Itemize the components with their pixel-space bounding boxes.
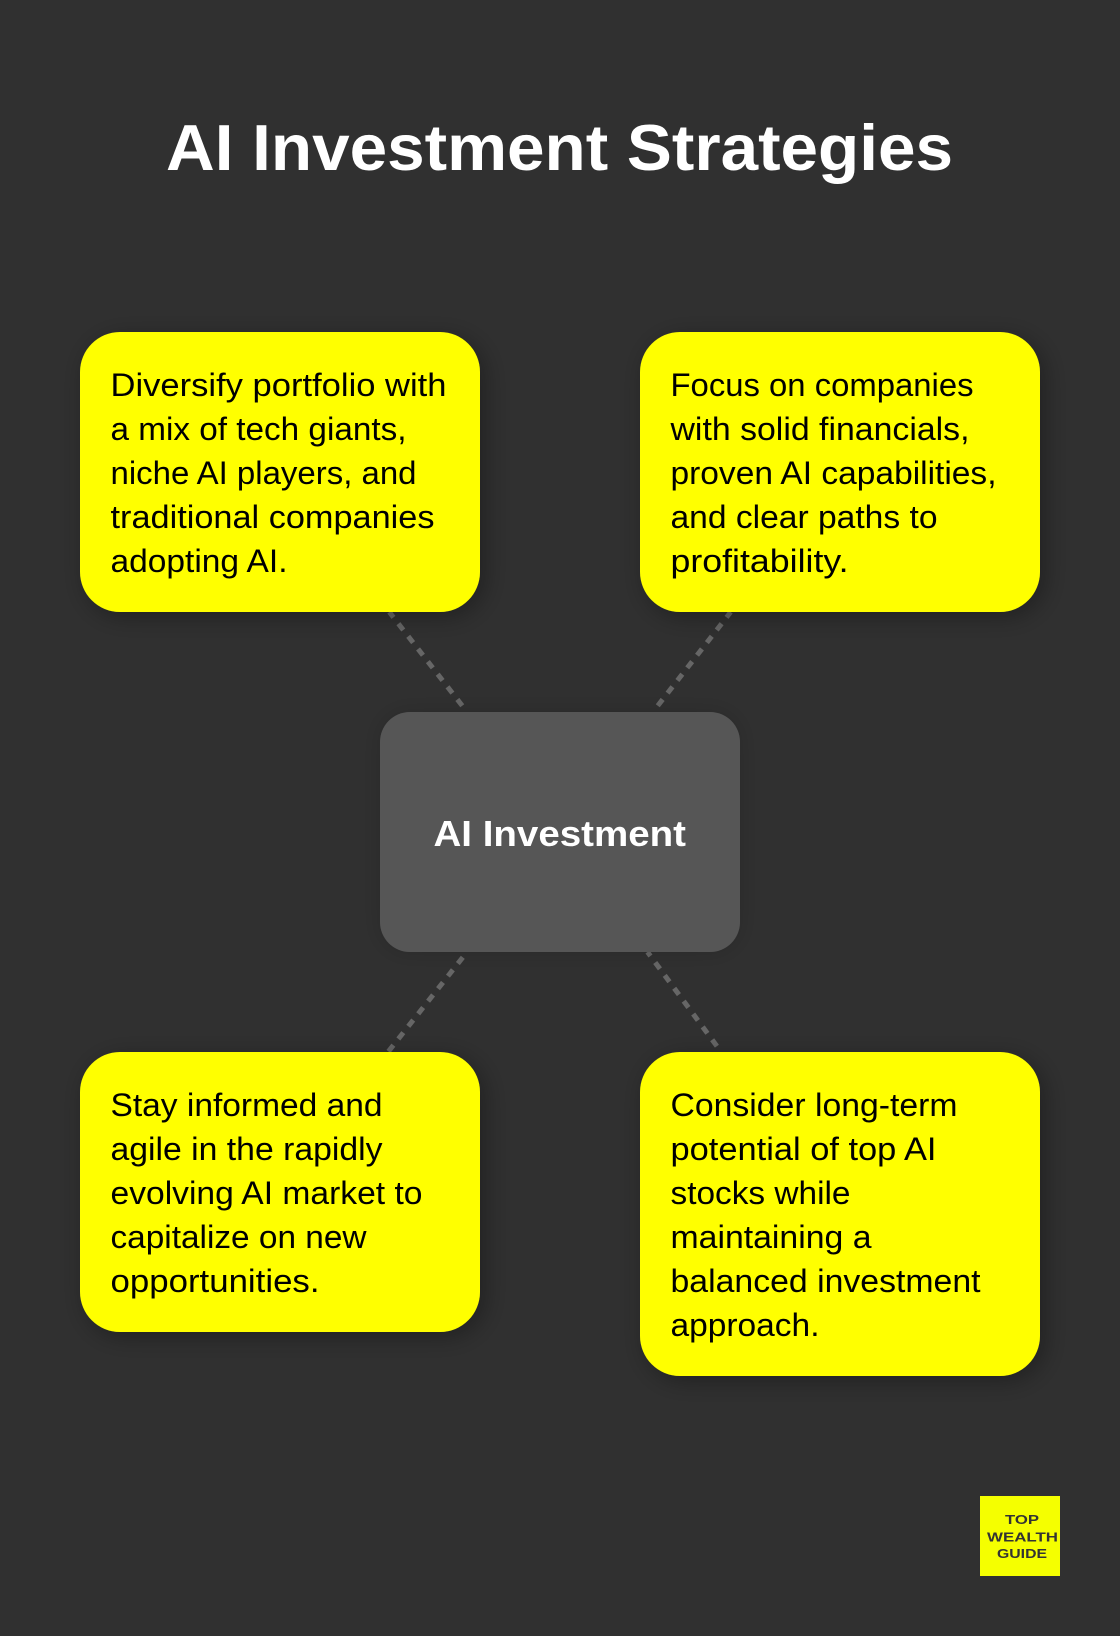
centre label: AI Investment [434,813,686,854]
logo: Top Wealth Guide: WEALTH [987,1530,1058,1544]
panel: centre node [380,712,740,952]
logo: Top Wealth Guide: TOP [1005,1512,1039,1527]
connector: bottom-left card to centre [388,952,467,1052]
text: long-term potential [670,1087,981,1343]
text: focus on companies: profitability. [670,543,848,579]
logo: Top Wealth Guide: GUIDE [997,1546,1047,1561]
connector: bottom-right card to centre [648,952,721,1052]
text: focus on companies: with solid financials, [669,411,970,447]
text: long-term potential: stocks while [670,1175,850,1211]
text: focus on companies [669,367,996,579]
panel: diversify portfolio [80,332,480,612]
text: long-term potential: balanced investment [670,1263,981,1299]
text: diversify portfolio: niche AI players, and [110,455,416,491]
text: stay informed: Stay informed and [110,1087,382,1123]
text: stay informed: opportunities. [110,1263,320,1299]
text: long-term potential: potential of top AI [670,1131,936,1167]
panel: focus on companies [640,332,1040,612]
text: stay informed [110,1087,422,1299]
connector: top-right card to centre [653,612,731,712]
text: focus on companies: and clear paths to [670,499,938,535]
text: diversify portfolio [110,367,446,579]
connector: top-left card to centre [389,612,467,712]
text: long-term potential: maintaining a [670,1219,872,1255]
text: diversify portfolio: adopting AI. [110,543,288,579]
text: diversify portfolio: Diversify portfolio with [110,367,446,403]
text: stay informed: evolving AI market to [110,1175,422,1211]
text: stay informed: capitalize on new [110,1219,367,1255]
panel: long-term potential [640,1052,1040,1376]
text: long-term potential: Consider long-term [670,1087,958,1123]
text: diversify portfolio: traditional companies [110,499,434,535]
text: long-term potential: approach. [670,1307,820,1343]
title: AI Investment Strategies [166,111,953,184]
logo: Top Wealth Guide [980,1496,1060,1576]
text: stay informed: agile in the rapidly [110,1131,382,1167]
panel: stay informed [80,1052,480,1332]
text: focus on companies: Focus on companies [670,367,974,403]
text: diversify portfolio: a mix of tech giants, [110,411,406,447]
text: focus on companies: proven AI capabilities, [670,455,996,491]
